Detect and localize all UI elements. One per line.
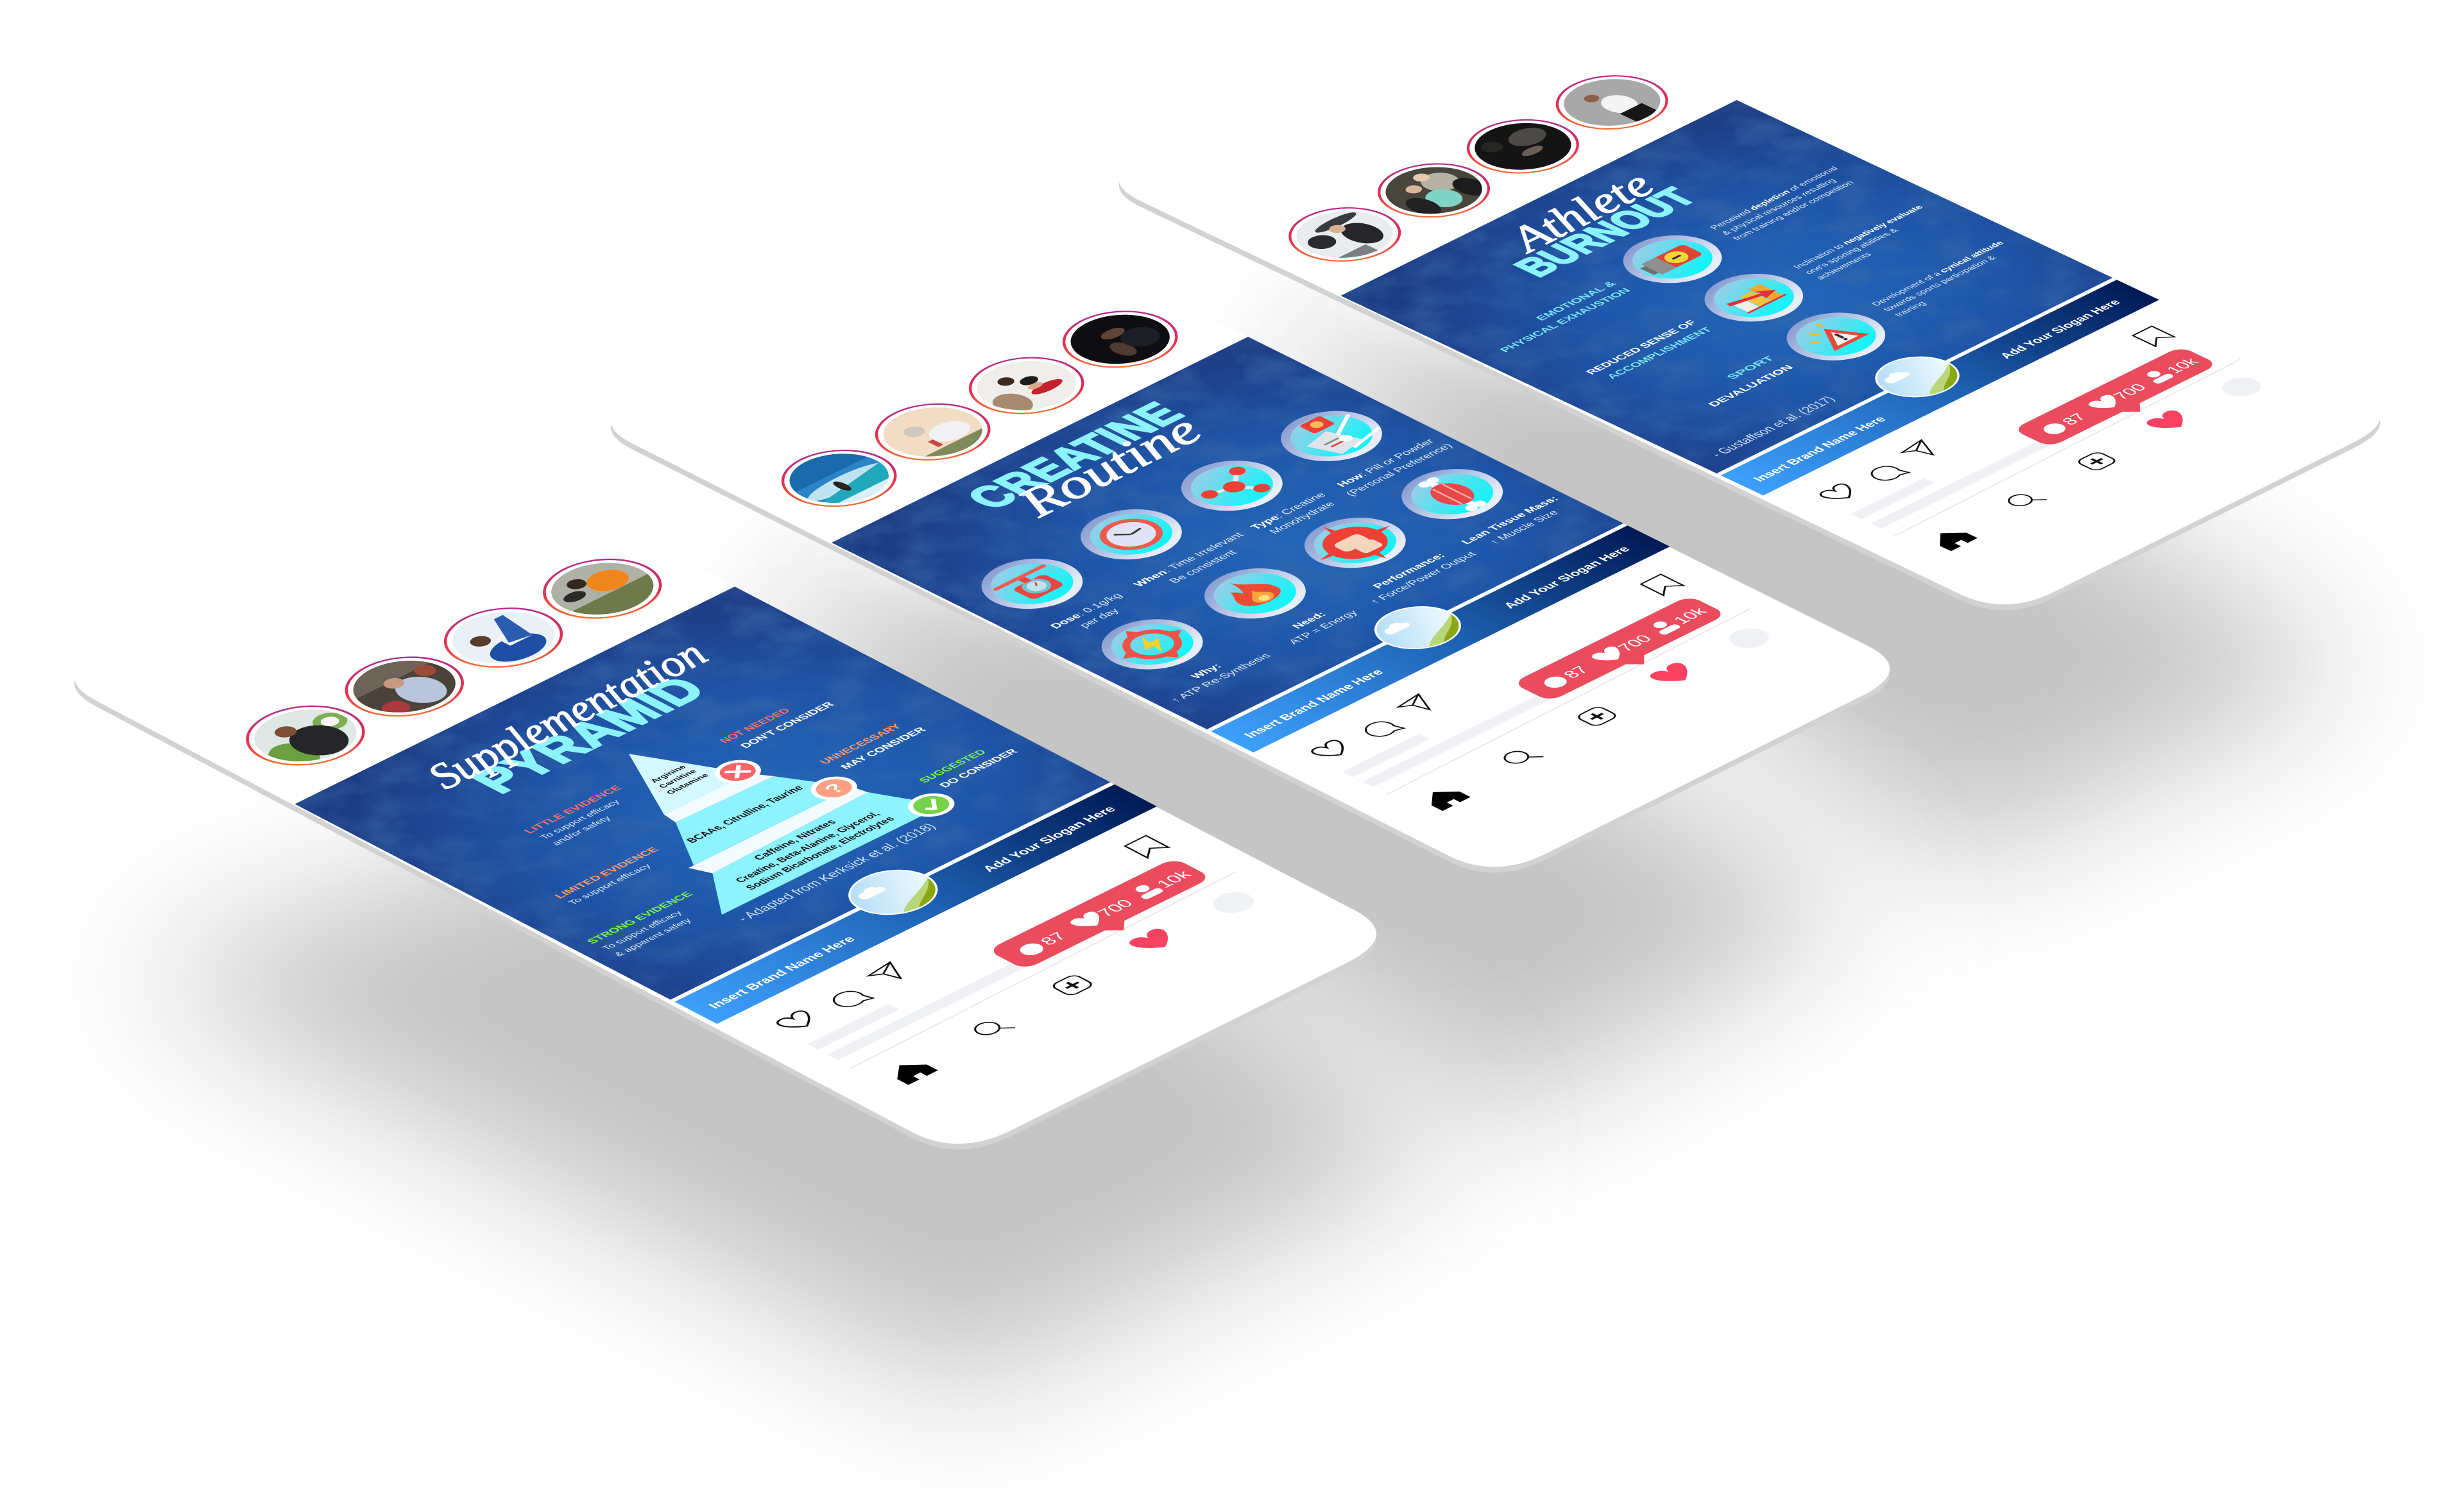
logo placeholder badge bbox=[1356, 597, 1479, 658]
right label: not needed bbox=[716, 692, 837, 752]
right label: unnecessary bbox=[817, 717, 929, 774]
left label: little evidence: LITTLE EVIDENCE bbox=[521, 784, 624, 835]
text: lean tissue mass: Lean Tissue Mass: bbox=[1458, 495, 1561, 546]
slogan: Add Your Slogan Here bbox=[1500, 545, 1634, 610]
phone 2 side edge bbox=[579, 221, 1918, 885]
icon: pill and powder bbox=[1260, 401, 1403, 471]
story 1: man with football bbox=[224, 694, 388, 777]
pyramid bbox=[518, 693, 964, 919]
nav icon: filled heart bbox=[2144, 409, 2195, 434]
title script: Supplementation bbox=[416, 634, 718, 797]
nav icon: filled heart bbox=[1647, 661, 1700, 688]
title bbox=[1466, 164, 1707, 282]
text: when: Be consistent bbox=[1166, 548, 1240, 585]
notification pill bbox=[2012, 346, 2228, 452]
icon: heart bbox=[775, 1010, 820, 1032]
icon: fire bbox=[1184, 558, 1326, 629]
title bold: BURNOUT bbox=[1504, 183, 1707, 282]
tier 1 text bbox=[645, 762, 710, 795]
phone 1: Supplementation Pyramid bbox=[42, 459, 1405, 1162]
poster background bbox=[832, 337, 1626, 731]
notification pill: 87 bbox=[1559, 663, 1593, 681]
tier 3 text: Creatine, Beta-Alanine, Glycerol, bbox=[732, 810, 882, 884]
title bold: PYRAMID bbox=[458, 670, 719, 800]
left label: limited evidence: LIMITED EVIDENCE bbox=[551, 845, 662, 900]
shadow: phone 1 bbox=[128, 706, 1444, 1392]
icon: send bbox=[1899, 440, 1942, 461]
text: when: When: Time Irrelevant bbox=[1131, 531, 1246, 588]
text: cynical attitude definition: training bbox=[1892, 300, 1928, 318]
icon: bookmark bbox=[1641, 574, 1684, 595]
nav icon: home bbox=[1419, 785, 1471, 811]
divider bbox=[844, 872, 1242, 1069]
divider bbox=[1888, 359, 2247, 536]
story 4: trainer in orange bbox=[520, 547, 684, 630]
notification pill: 700 bbox=[1613, 632, 1656, 654]
notification pill: 700 bbox=[2110, 382, 2150, 402]
title script: Routine bbox=[1004, 408, 1215, 525]
brand bar bbox=[1207, 523, 1670, 752]
right label: suggested: DO CONSIDER bbox=[936, 747, 1021, 789]
phone 3 stories row bbox=[1288, 75, 1668, 262]
right label: unnecessary: MAY CONSIDER bbox=[837, 726, 929, 770]
nav icon: search bbox=[970, 1017, 1015, 1040]
poster background bbox=[295, 586, 1113, 1001]
tier 1 text: Carnitine bbox=[656, 768, 699, 789]
phone 3 body bbox=[1089, 0, 2408, 616]
brand name: Insert Brand Name Here bbox=[705, 934, 859, 1010]
nav avatar placeholder bbox=[2214, 374, 2268, 400]
phone 1 poster bbox=[295, 586, 1113, 1001]
left label: strong evidence bbox=[584, 890, 721, 958]
icon: warning bbox=[1767, 303, 1906, 370]
story 4: dark gym athlete bbox=[1041, 300, 1200, 378]
phone 1 body bbox=[42, 459, 1405, 1157]
notification pill: 10k bbox=[2162, 356, 2203, 375]
pyramid gap strip upper bbox=[662, 768, 774, 824]
icon: molecule bbox=[1160, 450, 1303, 521]
right label: suggested: SUGGESTED bbox=[916, 748, 989, 785]
phone 1 side edge bbox=[42, 464, 1405, 1162]
caption placeholder line 2 bbox=[1871, 437, 2056, 529]
nav icon: add bbox=[1050, 974, 1095, 996]
phone 3 ear mark bbox=[1417, 37, 1430, 48]
icon: comment bbox=[1360, 718, 1404, 740]
left label: little evidence bbox=[521, 784, 649, 848]
nav icon: search bbox=[1500, 746, 1543, 768]
nav icon: home bbox=[1927, 527, 1978, 551]
nav avatar placeholder bbox=[1722, 624, 1777, 652]
title script: Athlete bbox=[1494, 165, 1666, 260]
icon: scale bbox=[961, 548, 1104, 619]
phone 1 stories row bbox=[224, 547, 684, 777]
logo placeholder badge bbox=[1858, 348, 1977, 405]
tier 2 bbox=[642, 760, 852, 865]
tier 1 text: Arginine bbox=[648, 764, 688, 784]
tier 3 text: Caffeine, Nitrates bbox=[751, 818, 839, 862]
left label: reduced accomplishment: ACCOMPLISHMENT bbox=[1604, 326, 1715, 380]
left label: limited evidence: To support efficacy bbox=[566, 862, 654, 906]
like count bbox=[2086, 394, 2125, 412]
right label: unnecessary: UNNECESSARY bbox=[817, 722, 904, 766]
shadow: phone 3 bbox=[1369, 257, 2361, 866]
notification pill bbox=[1512, 595, 1736, 706]
tier 1 text: Glutamine bbox=[664, 772, 710, 795]
title bold: CREATINE bbox=[955, 396, 1195, 515]
caption placeholder line 1 bbox=[807, 1004, 899, 1049]
shadow: phone 2 bbox=[860, 504, 1861, 1119]
text: negative evaluation definition: achievements bbox=[1813, 251, 1874, 281]
left label: little evidence: and/or safety bbox=[549, 815, 614, 847]
poster crumple texture bbox=[832, 337, 1626, 731]
poster background bbox=[1341, 100, 2115, 475]
title bbox=[955, 396, 1228, 532]
story 2: group bbox=[1356, 153, 1511, 228]
phone 1 ear mark bbox=[406, 516, 418, 527]
left label: sport devaluation: DEVALUATION bbox=[1706, 364, 1796, 408]
icon: heart bbox=[1310, 739, 1353, 761]
caption placeholder line 2 bbox=[827, 959, 1032, 1060]
badge: unnecessary bbox=[801, 772, 867, 805]
notification pill: 10k bbox=[1669, 605, 1711, 626]
right label: suggested bbox=[916, 740, 1021, 792]
action icons bbox=[771, 836, 1173, 1035]
brand name: Insert Brand Name Here bbox=[1750, 415, 1890, 484]
shadow corridor between phones 1 and 2 bbox=[642, 443, 1500, 927]
story 1: woman lifting bbox=[1288, 207, 1401, 262]
notification pill bbox=[987, 858, 1221, 974]
text: how: (Personal Preference) bbox=[1342, 442, 1455, 498]
brand bar bbox=[1716, 278, 2159, 495]
phone 2: Creatine Routine bbox=[579, 215, 1918, 885]
text: negative evaluation definition: one's sporting abilities & bbox=[1802, 227, 1901, 275]
tier 3 text: Sodium Bicarbonate, Electrolytes bbox=[742, 815, 897, 892]
tier 3 bbox=[672, 779, 943, 915]
notification pill: 700 bbox=[1093, 897, 1137, 919]
nav icon: home bbox=[885, 1058, 938, 1085]
notification pill: 87 bbox=[2058, 411, 2091, 427]
like count bbox=[1589, 645, 1629, 665]
left label: strong evidence: To support efficacy bbox=[600, 910, 685, 951]
poster crumple texture bbox=[295, 586, 1113, 1001]
divider bbox=[1379, 609, 1756, 795]
notification pill: 10k bbox=[1152, 868, 1195, 890]
text: why: ↑ ATP Re-Synthesis bbox=[1167, 652, 1274, 704]
icon: send bbox=[866, 962, 911, 985]
slogan: Add Your Slogan Here bbox=[979, 804, 1119, 874]
phone 2 ear mark bbox=[923, 269, 937, 281]
story 1: beach runner bbox=[760, 439, 918, 518]
comment count bbox=[1015, 941, 1048, 958]
left label: emotional exhaustion: PHYSICAL EXHAUSTION bbox=[1497, 287, 1634, 353]
comment count bbox=[2039, 421, 2070, 436]
text: why: Why: bbox=[1188, 662, 1224, 680]
phone 2 body bbox=[579, 215, 1918, 879]
icon: falling chart bbox=[1684, 264, 1824, 332]
left label: sport devaluation bbox=[1686, 354, 1797, 408]
left label: little evidence: To support efficacy bbox=[538, 799, 623, 840]
phone 3 side edge bbox=[1089, 0, 2408, 622]
text: need: Need: bbox=[1289, 610, 1329, 630]
follower count bbox=[1133, 884, 1152, 894]
text: depletion definition: Perceived depletion of emotional bbox=[1707, 166, 1840, 231]
left label: reduced accomplishment: REDUCED SENSE OF bbox=[1583, 319, 1699, 376]
story 2: coach in gym bbox=[323, 645, 486, 728]
action icons bbox=[1306, 574, 1688, 763]
badge: not needed bbox=[705, 755, 771, 788]
icon: comment bbox=[1866, 463, 1909, 484]
shadow corridor between phones 2 and 3 bbox=[1151, 196, 2008, 680]
icon: muscle and bone bbox=[1381, 459, 1524, 529]
phone 2 stories row bbox=[760, 300, 1200, 518]
text: performance: ↑ Force/Power Output bbox=[1367, 550, 1479, 606]
icon: heart bbox=[1818, 483, 1860, 504]
icon: send bbox=[1395, 694, 1439, 716]
right label: not needed: DON'T CONSIDER bbox=[737, 700, 837, 750]
follower count bbox=[2144, 369, 2163, 378]
action icons bbox=[1815, 326, 2179, 505]
left label: strong evidence: STRONG EVIDENCE bbox=[584, 890, 695, 946]
caption placeholder line 2 bbox=[1362, 692, 1556, 787]
nav icon: add bbox=[2076, 451, 2118, 471]
icon: fist target bbox=[1283, 507, 1426, 578]
text: depletion definition: from training and/or competition bbox=[1730, 180, 1856, 241]
story 3: man in blue jacket bbox=[422, 596, 585, 679]
badge: unnecessary: ? bbox=[819, 781, 850, 796]
poster crumple texture bbox=[1341, 100, 2115, 475]
text: dose: per day bbox=[1076, 606, 1122, 629]
phone 3 poster bbox=[1341, 100, 2115, 475]
text: type: Type: Creatine bbox=[1247, 491, 1329, 531]
phone 3: Athlete Burnout bbox=[1119, 75, 2381, 610]
icon: clock bbox=[1060, 499, 1202, 570]
icon: comment bbox=[828, 987, 873, 1010]
text: cynical attitude definition: Development of a cynical attitude bbox=[1869, 239, 2006, 307]
text: depletion definition: & physical resources resulting bbox=[1719, 177, 1838, 236]
icon: bookmark bbox=[2133, 326, 2175, 346]
notification pill: 87 bbox=[1036, 930, 1071, 947]
citation: - Gustaffson et al. (2017) bbox=[1707, 395, 1838, 459]
icon: battery bbox=[1603, 226, 1742, 293]
caption placeholder line 1 bbox=[1851, 478, 1935, 519]
nav icon: add bbox=[1575, 706, 1618, 727]
like count bbox=[1068, 910, 1109, 931]
phone 2 poster bbox=[832, 337, 1626, 731]
text: type: Monohydrate bbox=[1266, 500, 1338, 535]
text: dose: Dose: 0.1g/kg bbox=[1047, 591, 1125, 630]
left label: sport devaluation: SPORT bbox=[1724, 354, 1778, 381]
citation: - Adapted from Kerksick et al. (2018) bbox=[733, 821, 939, 924]
text: performance: Performance: bbox=[1370, 552, 1448, 590]
text: lean tissue mass: ↑ Muscle Size bbox=[1486, 509, 1561, 546]
story 2: runner with bottle bbox=[853, 393, 1012, 471]
story 3: woman running bbox=[947, 346, 1106, 425]
badge: suggested bbox=[898, 788, 964, 822]
nav avatar placeholder bbox=[1205, 888, 1262, 917]
pyramid gap strip lower bbox=[689, 786, 872, 877]
brand name: Insert Brand Name Here bbox=[1241, 668, 1387, 740]
tier 1 bbox=[587, 733, 748, 815]
nav icon: search bbox=[2004, 490, 2047, 511]
right label: not needed: NOT NEEDED bbox=[716, 706, 793, 745]
comment count bbox=[1539, 674, 1571, 690]
text: negative evaluation definition: Inclination to negatively evaluate bbox=[1791, 204, 1925, 270]
left label: emotional exhaustion: EMOTIONAL & bbox=[1533, 280, 1619, 322]
slogan: Add Your Slogan Here bbox=[1997, 298, 2124, 361]
caption placeholder line 1 bbox=[1342, 734, 1430, 777]
logo placeholder badge bbox=[830, 860, 956, 924]
icon: bookmark bbox=[1125, 836, 1168, 858]
text: need: ATP = Energy bbox=[1285, 609, 1360, 646]
title bbox=[404, 634, 762, 813]
story 3: dark gym bbox=[1446, 109, 1600, 184]
nav icon: filled heart bbox=[1126, 927, 1181, 955]
tier 2 text: BCAAs, Citrulline, Taurine bbox=[683, 784, 806, 845]
text: how: How: Pill or Powder bbox=[1333, 437, 1437, 488]
left label: strong evidence: & apparent safety bbox=[612, 917, 694, 958]
follower count bbox=[1650, 620, 1670, 629]
text: cynical attitude definition: towards sports participation & bbox=[1881, 254, 1999, 312]
brand bar bbox=[671, 782, 1157, 1024]
story 4: man in white bbox=[1535, 65, 1690, 140]
icon: energy cycle bbox=[1081, 609, 1224, 680]
